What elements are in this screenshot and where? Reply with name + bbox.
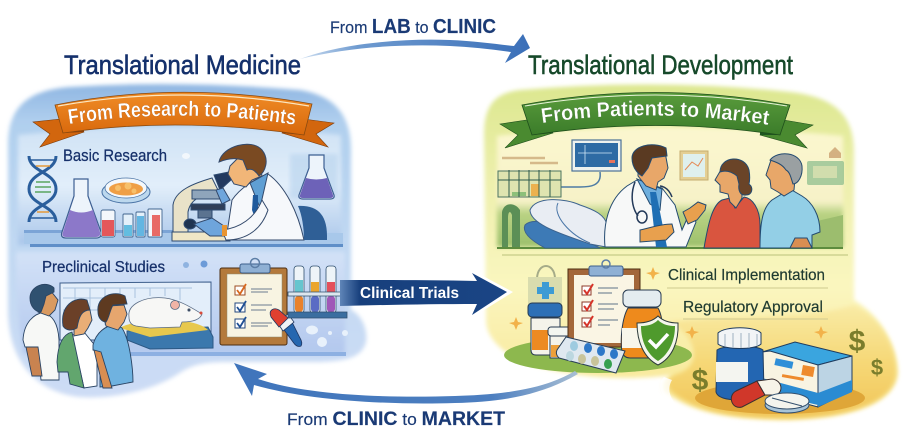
- icon: dollar signs: $: [871, 355, 883, 380]
- label: from clinic to market: From CLINIC to MARKET: [287, 409, 505, 430]
- illustration: group of researchers: [23, 284, 133, 388]
- person: man in blue: [93, 294, 133, 388]
- arrow: clinical trials: [340, 268, 513, 320]
- icon: test tube rack: [288, 266, 347, 318]
- panel: translational development: [484, 84, 898, 420]
- icon: medical bag: [528, 266, 562, 305]
- icon: dna helix: [29, 156, 56, 222]
- illustration: scientist: [194, 144, 304, 240]
- illustration: white rat: [129, 298, 202, 328]
- icon: white tablet: [765, 393, 809, 413]
- icon: hospital bed: [502, 200, 607, 248]
- illustration: doctor: [605, 145, 706, 247]
- illustration: man patient: [760, 154, 820, 248]
- illustration: woman patient: [704, 159, 760, 248]
- icon: red white capsule: [731, 379, 781, 407]
- icon: test tubes: [101, 209, 162, 237]
- label: basic research: Basic Research: [63, 146, 167, 165]
- icon: clipboard right: [568, 260, 640, 347]
- icon: monitor: [560, 140, 621, 187]
- illustration: wall items: [807, 147, 844, 185]
- icon: petri dish: [102, 178, 150, 203]
- title: from lab to clinic: From LAB to CLINIC: [330, 16, 496, 38]
- person: man with glasses: [23, 284, 59, 380]
- label: clinical implementation: Clinical Implementation: [668, 267, 825, 284]
- icon: dollar signs: $: [849, 325, 866, 358]
- banner: from patients to market: From Patients to Market: [541, 100, 770, 125]
- label: regulatory approval: Regulatory Approval: [683, 299, 823, 316]
- icon: clipboard left: [220, 258, 287, 345]
- banner: from research to patients: From Research to Patients: [68, 100, 296, 124]
- icon: red and blue marker: [270, 309, 302, 346]
- icon: orange bottle: [621, 290, 663, 358]
- arrow: clinic to market: [234, 363, 578, 403]
- icon: flask right: [299, 155, 334, 199]
- icon: dollar signs: [692, 325, 883, 397]
- icon: blue cap bottle: [528, 303, 562, 355]
- icon: lab chair: [298, 206, 327, 240]
- icon: small bottle: [548, 327, 573, 358]
- icon: large pill bottle: [716, 328, 764, 400]
- illustration: framed chart: [680, 151, 708, 180]
- panel: translational medicine: [8, 84, 366, 397]
- icon: bed rail: [498, 158, 561, 197]
- panel: basic research scene: [18, 126, 343, 247]
- banner: from patients to market: [499, 92, 814, 149]
- icon: purple flask: [62, 179, 101, 238]
- heading: translational development: Translational Development: [528, 50, 793, 80]
- icon: approval shield: [637, 316, 678, 365]
- arrow: lab to clinic: [300, 34, 530, 63]
- icon: blister pack: [556, 337, 625, 373]
- banner: from research to patients: [32, 92, 335, 148]
- icon: dollar signs: $: [692, 364, 709, 397]
- person: woman in green: [57, 299, 97, 388]
- icons: gold sparkles: [509, 267, 828, 339]
- icon: microscope: [172, 172, 231, 241]
- icon: animal cage: [60, 282, 213, 349]
- heading: translational medicine: Translational Medicine: [64, 50, 301, 80]
- label: preclinical studies: Preclinical Studies: [42, 259, 165, 276]
- icon: medicine box: [762, 342, 852, 407]
- panel: preclinical scene: [16, 252, 348, 356]
- label: clinical trials: Clinical Trials: [360, 285, 459, 302]
- panel: patient room: [497, 127, 843, 249]
